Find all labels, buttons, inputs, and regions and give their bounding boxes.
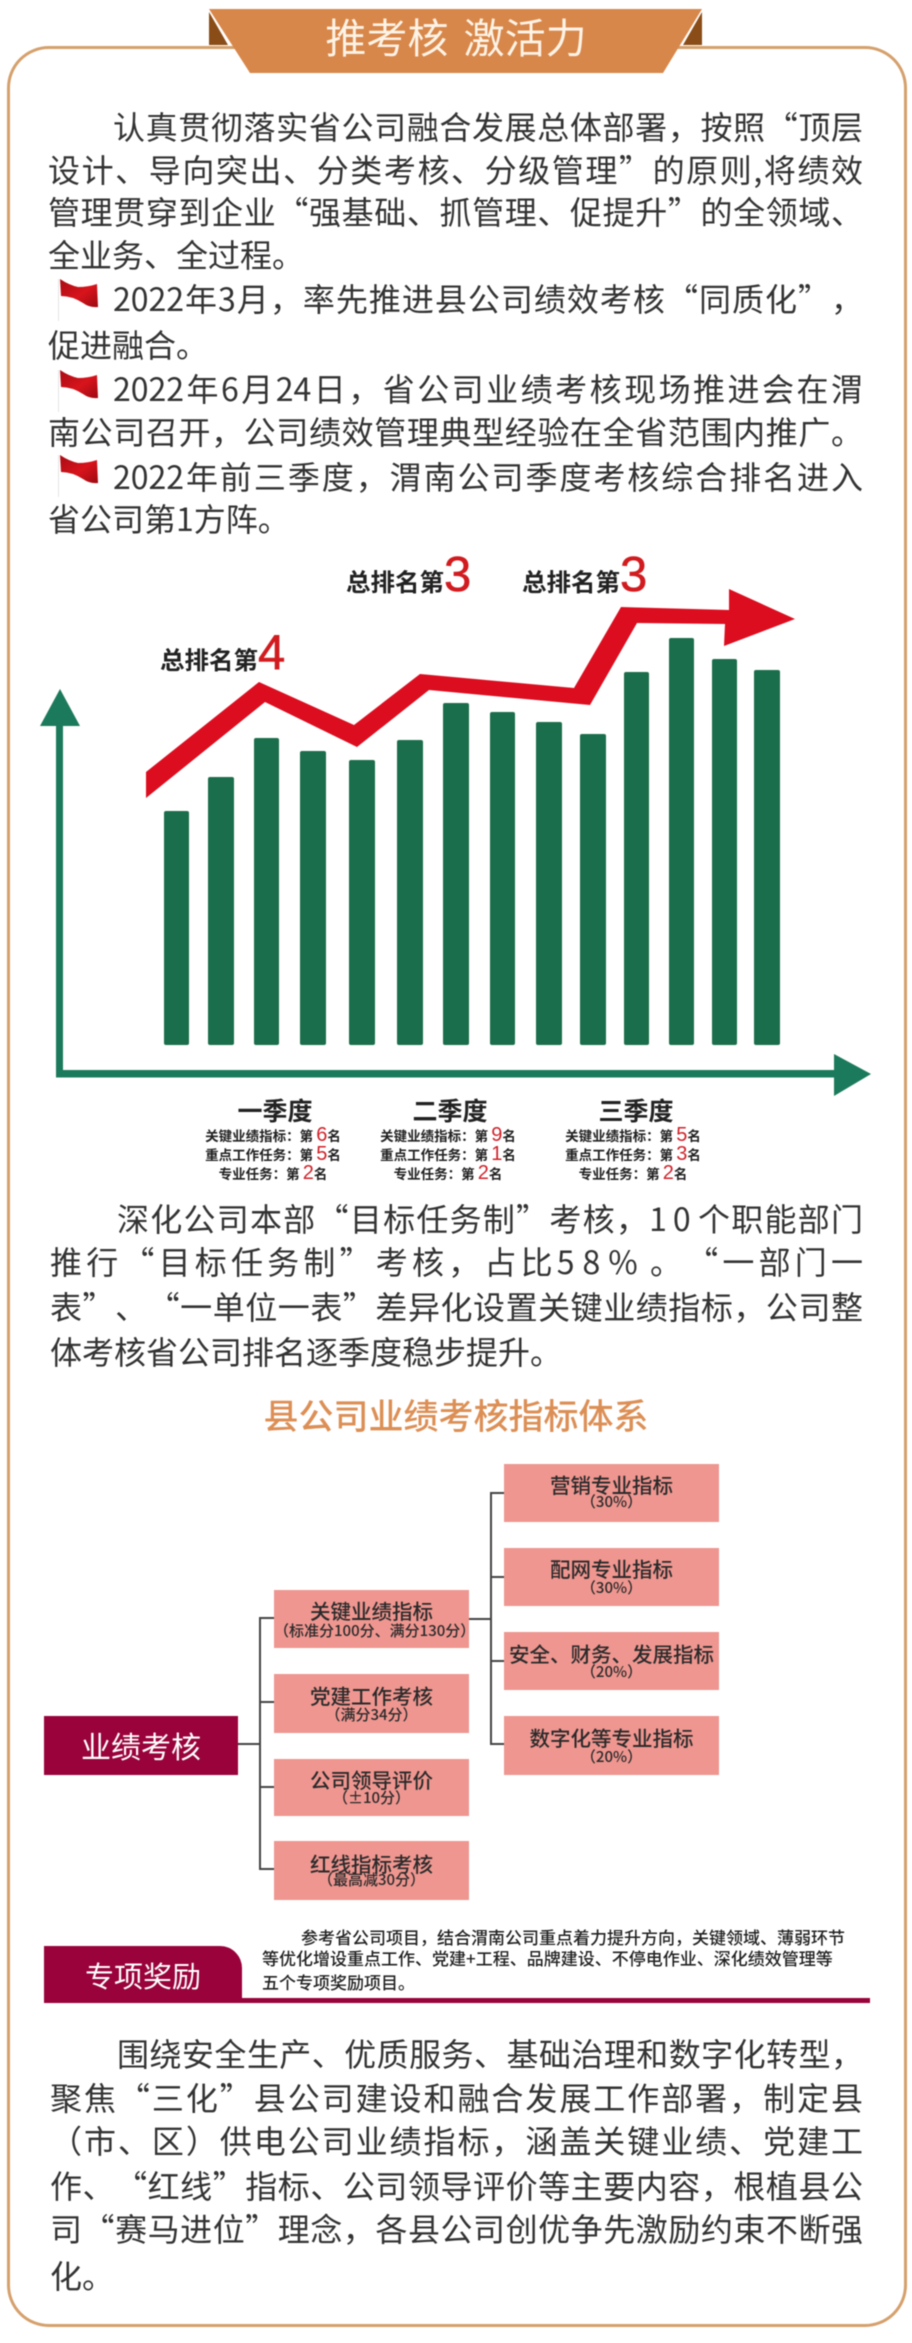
quarter 3 ranks: 关键业绩指标：第 5名 [565, 1124, 701, 1146]
box: 配网专业指标: （30%） [581, 1577, 642, 1598]
quarter 1 ranks: 一季度 [237, 1092, 312, 1128]
box: 党建工作考核 [274, 1674, 469, 1733]
closing paragraph: 司“赛马进位”理念，各县公司创优争先激励约束不断强 [50, 2205, 863, 2251]
special award tab with rule [43, 1945, 871, 2004]
closing paragraph: 聚焦“三化”县公司建设和融合发展工作部署，制定县 [50, 2074, 863, 2120]
intro paragraph: 全业务、全过程。 [48, 231, 304, 277]
box: 关键业绩指标: 关键业绩指标 [310, 1595, 433, 1625]
root box: 业绩考核 [44, 1716, 238, 1775]
title banner: 推考核 激活力 [325, 5, 587, 65]
box: 红线指标考核: （最高减30分） [318, 1869, 425, 1890]
title banner [208, 5, 703, 74]
intro paragraph: 认真贯彻落实省公司融合发展总体部署，按照“顶层 [113, 103, 863, 149]
closing paragraph: （市、区）供电公司业绩指标，涵盖关键业绩、党建工 [50, 2117, 863, 2163]
closing paragraph: 作、“红线”指标、公司领导评价等主要内容，根植县公 [50, 2162, 863, 2208]
box: 公司领导评价 [274, 1759, 469, 1816]
quarter 2 ranks [380, 1092, 516, 1184]
box: 安全、财务、发展指标 [504, 1632, 719, 1690]
y axis arrow [40, 689, 80, 1077]
quarter 1 ranks: 关键业绩指标：第 6名 [205, 1124, 341, 1146]
box: 党建工作考核: （满分34分） [325, 1704, 418, 1725]
quarter 3 ranks [565, 1092, 701, 1184]
special award note: 参考省公司项目，结合渭南公司重点着力提升方向，关键领域、薄弱环节 [301, 1924, 845, 1949]
icon: red flag [58, 454, 99, 497]
bar chart [40, 588, 872, 1096]
intro paragraph: 设计、导向突出、分类考核、分级管理”的原则,将绩效 [48, 146, 863, 192]
closing paragraph [50, 2030, 863, 2298]
box: 配网专业指标: 配网专业指标 [550, 1553, 673, 1583]
box: 数字化等专业指标: 数字化等专业指标 [530, 1722, 694, 1752]
special award note [262, 1924, 845, 1994]
quarter 1 ranks [205, 1092, 341, 1184]
intro paragraph [48, 103, 863, 277]
special award note: 五个专项奖励项目。 [262, 1969, 415, 1994]
quarter 3 ranks: 三季度 [598, 1092, 674, 1128]
special award tab with rule: 专项奖励 [85, 1954, 201, 1996]
quarter 2 ranks: 专业任务：第 2名 [394, 1162, 502, 1184]
milestone: 2022年6月24日: 2022年6月24日，省公司业绩考核现场推进会在渭 [113, 365, 863, 411]
box: 营销专业指标: 营销专业指标 [550, 1469, 673, 1499]
icon: red flag [58, 370, 99, 412]
rank label: 总排名第3: 总排名第3 [346, 548, 471, 602]
box: 党建工作考核: 党建工作考核 [310, 1680, 433, 1710]
milestone: 2022年前三季度 [48, 453, 863, 541]
box: 安全、财务、发展指标: （20%） [581, 1661, 642, 1682]
special award note: 等优化增设重点工作、党建+工程、品牌建设、不停电作业、深化绩效管理等 [262, 1945, 833, 1970]
quarter 2 ranks: 二季度 [412, 1092, 488, 1128]
org chart connectors [237, 1491, 505, 1871]
box: 红线指标考核: 红线指标考核 [310, 1848, 433, 1878]
milestone: 2022年6月24日: 南公司召开，公司绩效管理典型经验在全省范围内推广。 [48, 408, 863, 454]
quarter 2 ranks: 关键业绩指标：第 9名 [380, 1124, 516, 1146]
paragraph: 目标任务制 [50, 1195, 863, 1374]
box: 关键业绩指标 [274, 1590, 469, 1648]
quarter 3 ranks: 重点工作任务：第 3名 [565, 1143, 701, 1165]
quarter 1 ranks: 专业任务：第 2名 [219, 1162, 327, 1184]
closing paragraph: 化。 [50, 2252, 114, 2298]
red trend arrow [146, 589, 795, 798]
box: 配网专业指标 [504, 1548, 719, 1606]
box: 营销专业指标 [504, 1464, 719, 1522]
box: 红线指标考核 [274, 1841, 469, 1900]
box: 公司领导评价: （±10分） [333, 1787, 410, 1808]
milestone: 2022年6月24日 [48, 365, 863, 454]
box: 营销专业指标: （30%） [581, 1491, 642, 1512]
root box: 业绩考核: 业绩考核 [81, 1723, 201, 1767]
icon: red flag [58, 278, 99, 321]
box: 数字化等专业指标: （20%） [581, 1746, 642, 1767]
milestone: 2022年前三季度: 2022年前三季度，渭南公司季度考核综合排名进入 [113, 453, 863, 499]
quarter 3 ranks: 专业任务：第 2名 [579, 1162, 687, 1184]
milestone: 2022年3月: 促进融合。 [48, 321, 208, 367]
box: 数字化等专业指标 [504, 1716, 719, 1775]
quarter 2 ranks: 重点工作任务：第 1名 [380, 1143, 516, 1165]
chart heading: 县公司业绩考核指标体系 [263, 1389, 648, 1440]
bars [164, 638, 780, 1045]
paragraph: 目标任务制: 深化公司本部“目标任务制”考核，10个职能部门 [117, 1195, 863, 1241]
milestone: 2022年3月 [48, 275, 863, 367]
box: 安全、财务、发展指标: 安全、财务、发展指标 [509, 1638, 714, 1668]
paragraph: 目标任务制: 推行“目标任务制”考核，占比58%。“一部门一 [50, 1238, 863, 1284]
paragraph: 目标任务制: 体考核省公司排名逐季度稳步提升。 [50, 1328, 562, 1374]
rank label: 总排名第4: 总排名第4 [160, 626, 285, 680]
closing paragraph: 围绕安全生产、优质服务、基础治理和数字化转型， [117, 2030, 863, 2076]
x axis arrow [56, 1054, 871, 1096]
intro paragraph: 管理贯穿到企业“强基础、抓管理、促提升”的全领域、 [48, 188, 863, 234]
box: 关键业绩指标: （标准分100分、满分130分） [274, 1620, 475, 1641]
milestone: 2022年3月: 2022年3月，率先推进县公司绩效考核“同质化”， [113, 275, 863, 321]
rank label: 总排名第3: 总排名第3 [522, 548, 647, 602]
box: 公司领导评价: 公司领导评价 [310, 1764, 433, 1794]
paragraph: 目标任务制: 表”、“一单位一表”差异化设置关键业绩指标，公司整 [50, 1283, 863, 1329]
quarter 1 ranks: 重点工作任务：第 5名 [205, 1143, 341, 1165]
milestone: 2022年前三季度: 省公司第1方阵。 [48, 495, 290, 541]
